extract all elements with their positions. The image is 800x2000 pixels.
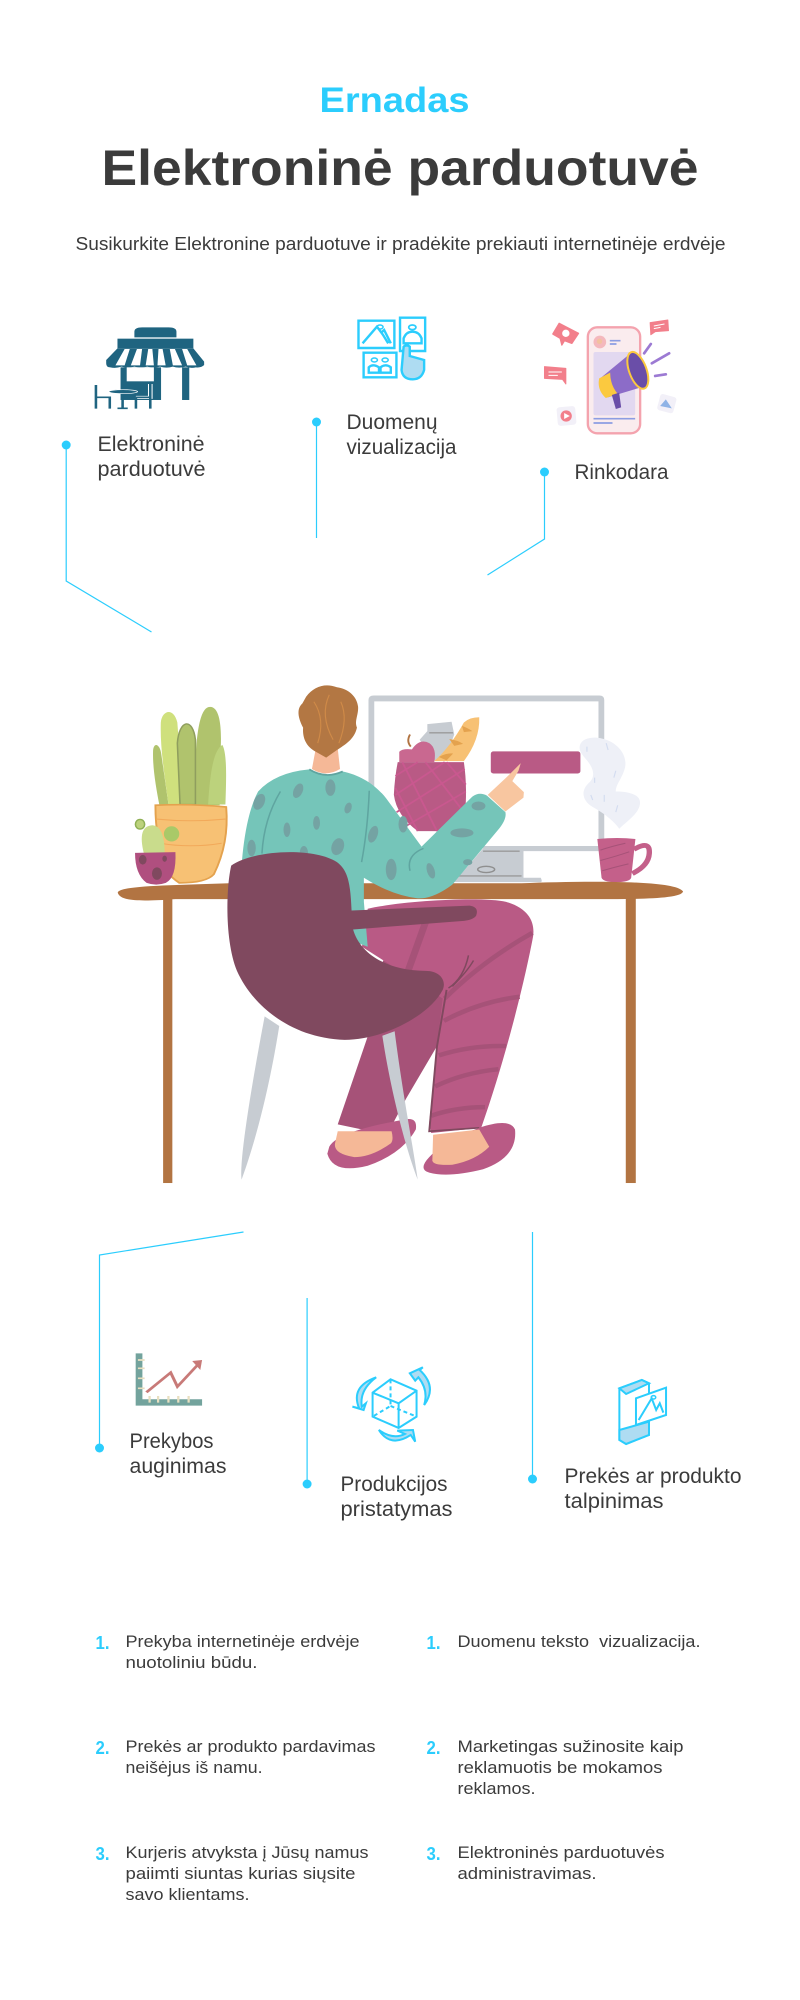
label: data visualisation: Duomenų xyxy=(346,411,438,434)
list item 2: 2. xyxy=(96,1738,110,1758)
list item 1: Duomenu teksto vizualizacija. xyxy=(458,1632,700,1651)
label: product hosting: Prekės ar produkto xyxy=(564,1465,742,1488)
label: sales growth: Prekybos xyxy=(130,1430,214,1453)
desk xyxy=(118,882,683,1183)
list item 2: Prekės ar produkto pardavimas xyxy=(126,1737,376,1756)
list item 3 xyxy=(96,1843,368,1904)
list item 2 xyxy=(96,1737,376,1777)
list item 2: reklamuotis be mokamos xyxy=(458,1758,662,1777)
list item 1: Prekyba internetinėje erdvėje xyxy=(126,1632,360,1651)
chair front legs xyxy=(241,1016,418,1180)
label: sales growth: auginimas xyxy=(130,1455,226,1478)
chair back legs xyxy=(435,921,457,976)
brand name: Ernadas xyxy=(320,81,470,120)
list item 3: savo klientams. xyxy=(126,1885,250,1904)
hand xyxy=(488,763,524,811)
plant xyxy=(153,707,227,883)
sweater xyxy=(240,769,506,947)
label: product hosting: talpinimas xyxy=(564,1490,664,1513)
groceries on screen xyxy=(394,717,479,831)
label: delivery xyxy=(340,1473,452,1521)
connector: sales growth xyxy=(95,1232,244,1452)
icon: store xyxy=(90,327,204,410)
list item 3: Kurjeris atvyksta į Jūsų namus xyxy=(126,1843,368,1862)
neck xyxy=(312,748,340,773)
monitor xyxy=(368,696,604,882)
label: store xyxy=(98,433,206,481)
mug xyxy=(597,838,649,882)
icon: rotating cube xyxy=(352,1367,430,1442)
icon: gallery and hand xyxy=(358,318,425,379)
slippers and feet xyxy=(327,1119,515,1175)
list item 3: 3. xyxy=(426,1844,440,1864)
label: sales growth xyxy=(130,1430,226,1478)
list item 3: Elektroninės parduotuvės xyxy=(458,1843,664,1862)
cactus pot xyxy=(135,819,179,885)
label: data visualisation: vizualizacija xyxy=(346,436,457,459)
connector: marketing xyxy=(488,468,549,575)
trousers xyxy=(338,899,533,1135)
connector: delivery xyxy=(303,1298,312,1488)
title block xyxy=(76,81,726,254)
icon: phone with megaphone xyxy=(544,320,677,433)
connector: product hosting xyxy=(528,1232,537,1484)
label: data visualisation xyxy=(346,411,457,459)
list: right column xyxy=(426,1632,700,1883)
label: delivery: Produkcijos xyxy=(340,1473,448,1496)
list item 2: 2. xyxy=(426,1738,440,1758)
label: marketing: Rinkodara xyxy=(574,461,669,484)
list item 1 xyxy=(96,1632,360,1672)
connector: store xyxy=(62,440,152,632)
icon: growth chart xyxy=(136,1353,202,1406)
chair xyxy=(227,852,477,1040)
list item 2 xyxy=(426,1737,684,1798)
list item 1: 1. xyxy=(426,1633,440,1653)
icon: phone with picture xyxy=(619,1380,666,1444)
list item 2: Marketingas sužinosite kaip xyxy=(458,1737,684,1756)
list item 3: paiimti siuntas kurias siųsite xyxy=(126,1864,356,1883)
on-screen button xyxy=(491,751,580,774)
list item 3: administravimas. xyxy=(458,1864,596,1883)
subtitle: Susikurkite Elektronine parduotuve ir pradėkite prekiauti internetinėje erdvėje xyxy=(76,234,726,254)
label: store: parduotuvė xyxy=(98,458,206,481)
list item 1: 1. xyxy=(96,1633,110,1653)
list item 2: neišėjus iš namu. xyxy=(126,1758,262,1777)
list item 2: reklamos. xyxy=(458,1779,536,1798)
connector: data visualisation xyxy=(312,418,321,538)
illustration: person at desk xyxy=(118,685,683,1183)
hair xyxy=(299,685,358,758)
list item 3 xyxy=(426,1843,664,1883)
list item 1: nuotoliniu būdu. xyxy=(126,1653,258,1672)
label: store: Elektroninė xyxy=(98,433,204,456)
main heading: Elektroninė parduotuvė xyxy=(102,140,698,196)
list item 3: 3. xyxy=(96,1844,110,1864)
label: product hosting xyxy=(564,1465,742,1513)
label: delivery: pristatymas xyxy=(340,1498,452,1521)
steam xyxy=(580,738,640,829)
list: left column xyxy=(96,1632,376,1904)
